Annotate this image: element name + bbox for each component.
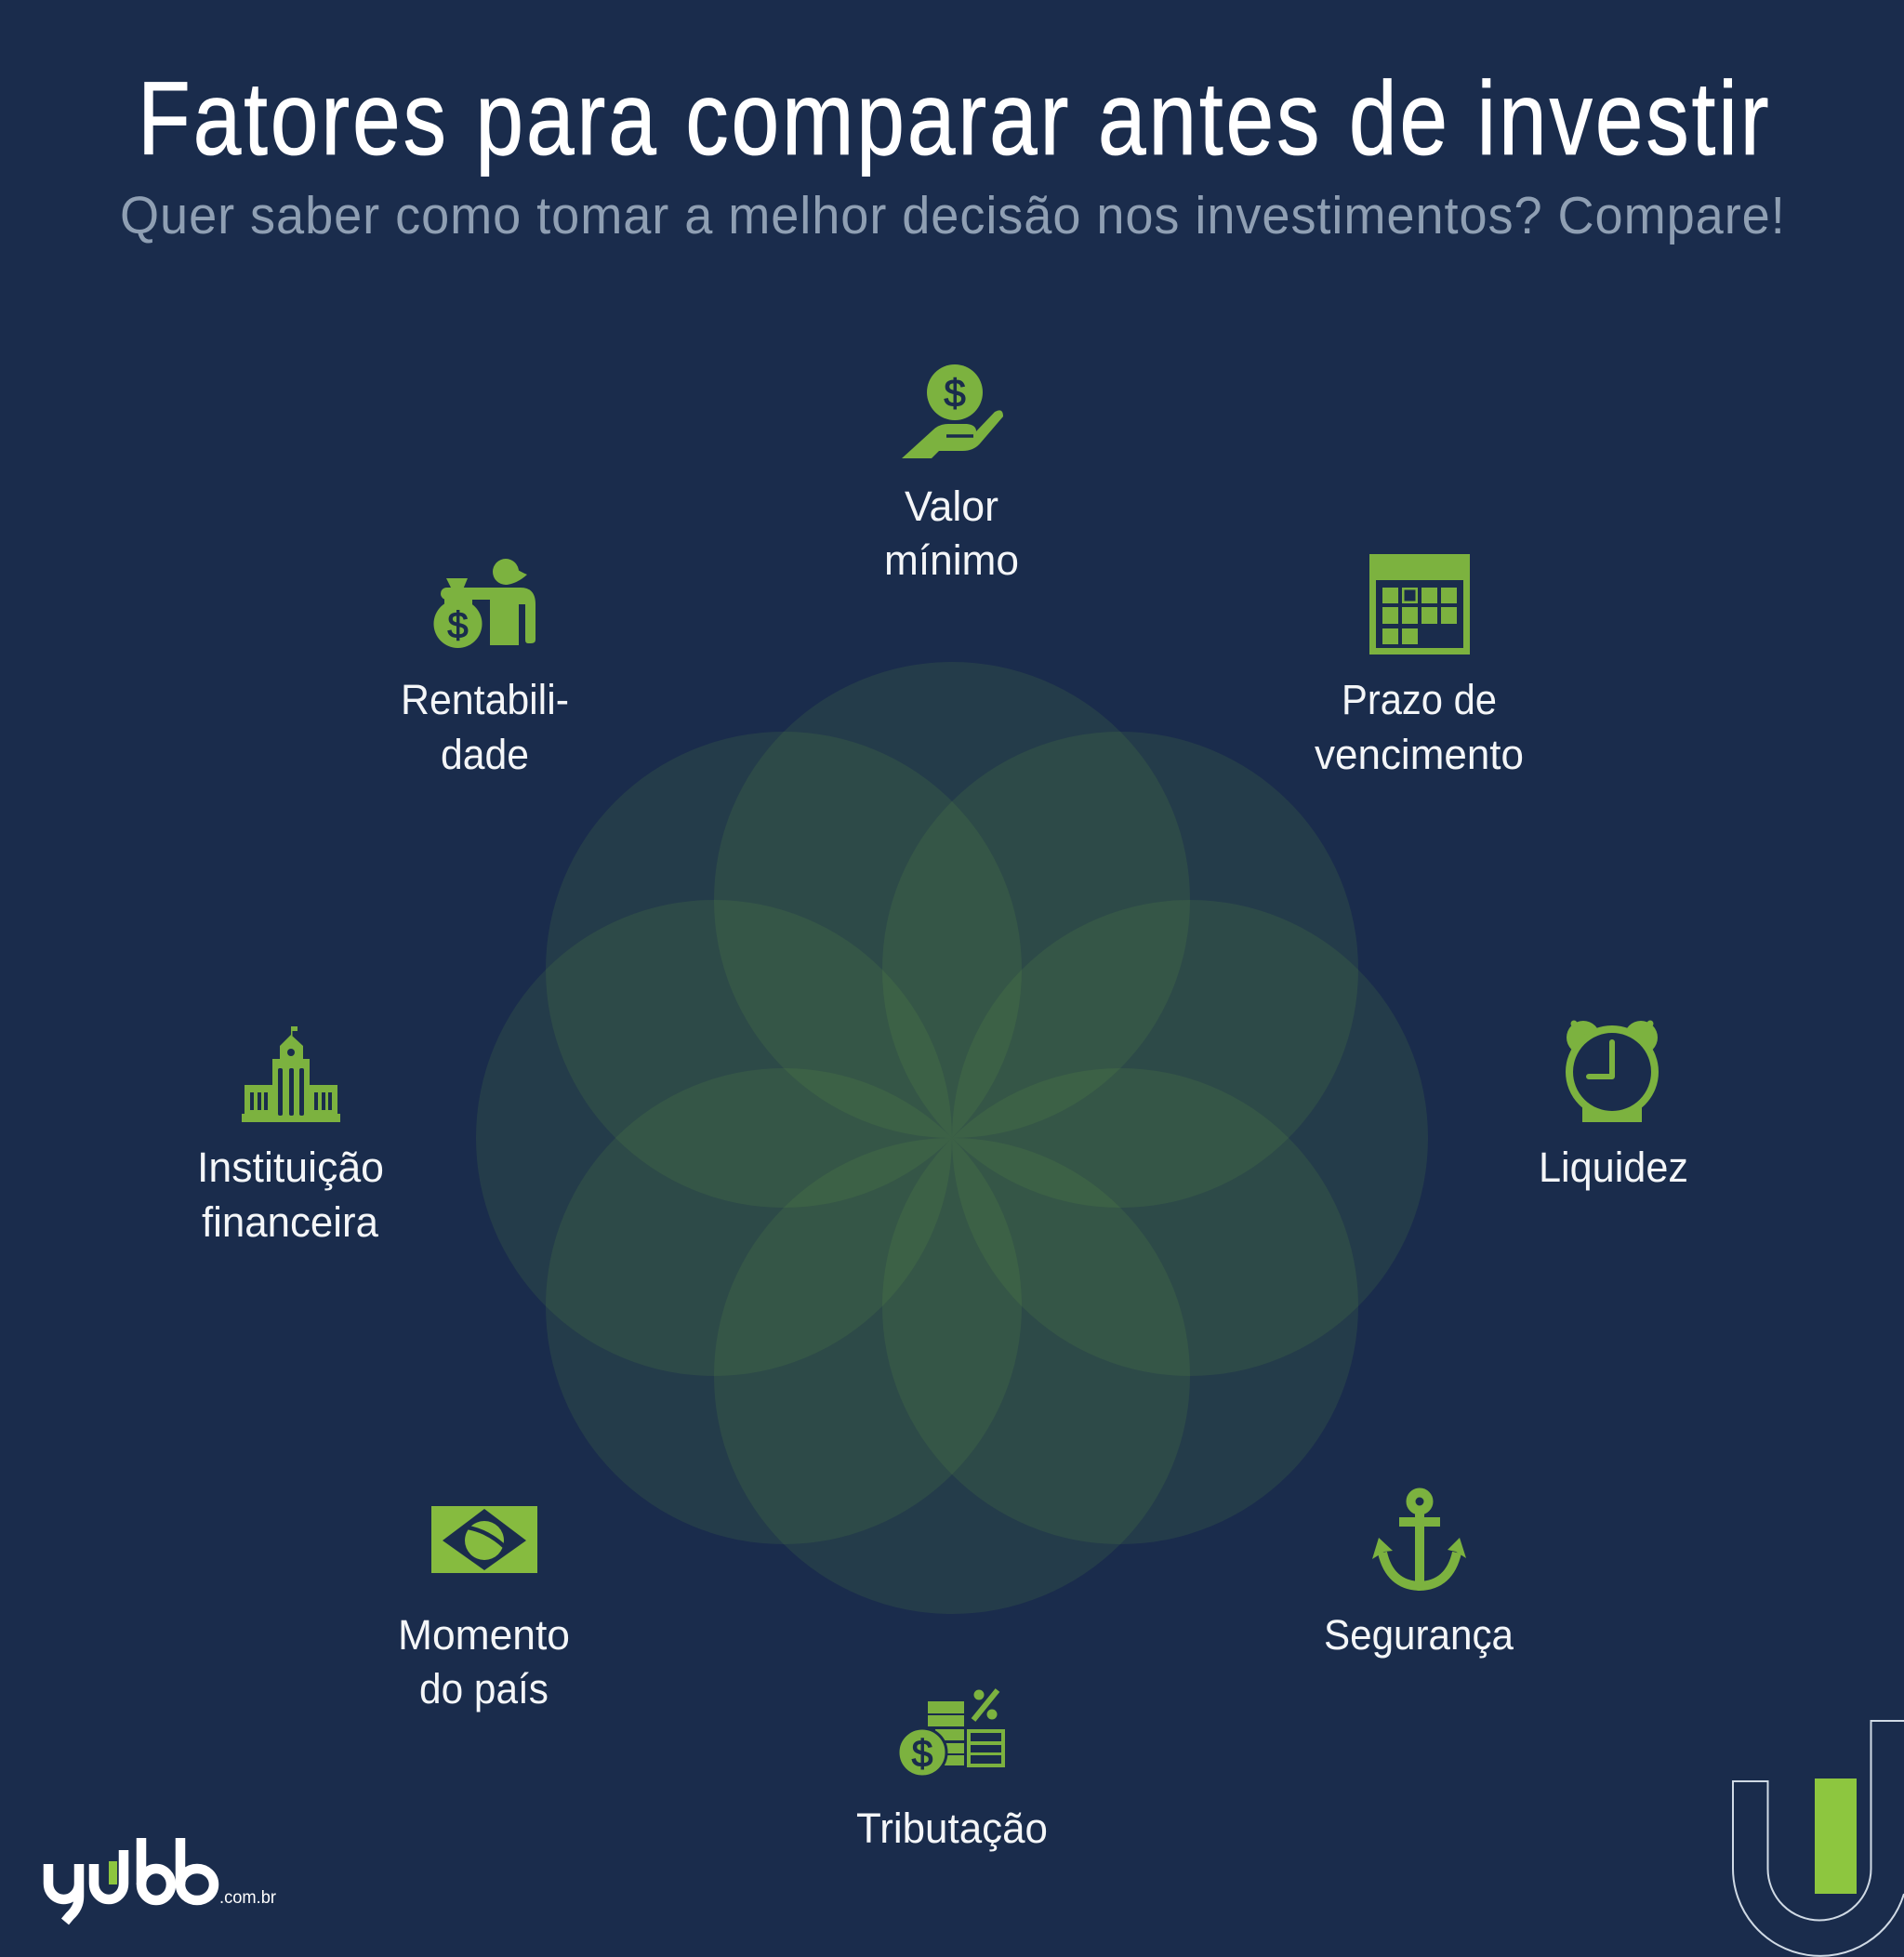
label: do país: [419, 1665, 549, 1712]
label: financeira: [202, 1198, 379, 1246]
label: mínimo: [884, 536, 1019, 584]
corner brand mark: outlined U with green bar: [1733, 1721, 1904, 1956]
icon: institution building: [242, 1026, 340, 1122]
label: dade: [441, 731, 529, 778]
label: Rentabili-: [401, 676, 569, 723]
icon: person with money bag: $: [447, 605, 469, 646]
logo: yubb.com.br: .com.br: [219, 1888, 277, 1908]
label: Prazo de: [1342, 676, 1497, 723]
icon: calendar: [1369, 554, 1470, 655]
label: Momento: [398, 1611, 570, 1659]
factor: Prazo de vencimento: [1315, 554, 1524, 778]
subtitle: Quer saber como tomar a melhor decisão nos investimentos? Compare!: [120, 186, 1785, 245]
icon: hand holding coin: [902, 364, 1003, 458]
label: Valor: [905, 483, 998, 530]
label: Instituição: [197, 1144, 384, 1191]
icon: person with money bag: [433, 559, 536, 648]
factor: Valor mínimo: [884, 364, 1019, 584]
logo: yubb.com.br: [48, 1838, 277, 1922]
label: Liquidez: [1539, 1144, 1688, 1191]
icon: hand holding coin: $: [944, 371, 966, 415]
icon: coins, table and percent: $: [912, 1732, 933, 1775]
icon: alarm clock: [1567, 1021, 1658, 1122]
factor: Instituição financeira: [197, 1026, 384, 1246]
factor: Segurança: [1324, 1493, 1514, 1659]
label: vencimento: [1315, 731, 1524, 778]
factor: Rentabilidade: [401, 559, 569, 778]
factor: Liquidez: [1539, 1021, 1688, 1191]
label: Segurança: [1324, 1611, 1514, 1659]
icon: coins, table and percent: [898, 1690, 1005, 1777]
factor: Tributação: [856, 1690, 1048, 1852]
label: Tributação: [856, 1805, 1048, 1852]
icon: anchor: [1372, 1493, 1466, 1586]
title: Fatores para comparar antes de investir: [138, 60, 1769, 177]
factor: Momento do país: [398, 1506, 570, 1712]
icon: Brazil flag: [431, 1506, 537, 1573]
flower of overlapping circles: [476, 662, 1428, 1614]
